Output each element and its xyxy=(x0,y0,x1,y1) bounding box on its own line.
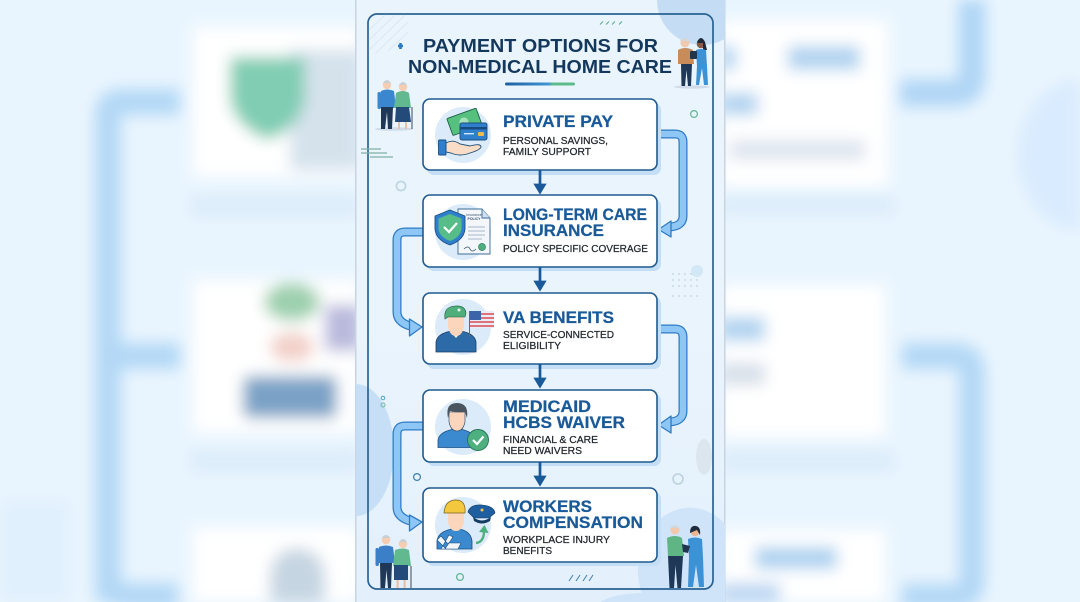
heading xyxy=(503,206,647,240)
icon: shield and policy: POLICY xyxy=(467,217,481,221)
connector: Medicaid to workers compensation xyxy=(397,426,423,531)
heading: LONG-TERM CARE xyxy=(503,206,647,224)
blurred background: right side xyxy=(720,0,1080,602)
connector: long-term care to VA benefits xyxy=(397,232,423,336)
description: WORKPLACE INJURY xyxy=(503,534,610,546)
people: elder and nurse top right xyxy=(674,38,710,89)
people: couple top left xyxy=(375,80,413,131)
icon: money, card and hand xyxy=(435,107,491,163)
description: ELIGIBILITY xyxy=(503,340,561,352)
heading: PRIVATE PAY xyxy=(503,113,613,131)
title xyxy=(408,35,672,77)
icon: person with check xyxy=(435,399,491,455)
heading: COMPENSATION xyxy=(503,514,643,532)
panel: VA benefits xyxy=(423,293,661,369)
heading: INSURANCE xyxy=(503,222,604,240)
arrow down 3 xyxy=(534,364,546,388)
outer frame xyxy=(368,14,713,589)
title: PAYMENT OPTIONS FOR xyxy=(423,35,658,56)
arrow down 2 xyxy=(534,267,546,291)
decorative accents xyxy=(361,15,712,581)
description: FAMILY SUPPORT xyxy=(503,146,592,158)
panel: long-term care insurance xyxy=(423,195,661,271)
description xyxy=(503,135,608,158)
description xyxy=(503,329,614,352)
heading: VA BENEFITS xyxy=(503,309,614,327)
description xyxy=(503,534,610,557)
heading: WORKERS xyxy=(503,498,592,516)
heading xyxy=(503,398,625,432)
description: FINANCIAL & CARE xyxy=(503,434,598,446)
description: NEED WAIVERS xyxy=(503,445,582,457)
icon: soldier and flag xyxy=(435,299,494,355)
icon: shield and policy xyxy=(435,204,491,260)
panel: workers compensation xyxy=(423,488,661,566)
heading: MEDICAID xyxy=(503,398,591,416)
connector: VA benefits to Medicaid xyxy=(657,329,683,433)
title underline xyxy=(505,82,575,86)
center panel background xyxy=(355,0,726,602)
arrow down 4 xyxy=(534,462,546,486)
arrow down 1 xyxy=(534,170,546,194)
heading: HCBS WAIVER xyxy=(503,414,625,432)
connector: private pay to long-term care xyxy=(657,134,683,237)
description: PERSONAL SAVINGS, xyxy=(503,135,608,147)
description: POLICY SPECIFIC COVERAGE xyxy=(503,243,648,255)
people: man and nurse bottom right xyxy=(667,525,704,588)
description: BENEFITS xyxy=(503,545,552,557)
people: couple bottom left xyxy=(376,535,411,588)
icon: worker and cap xyxy=(435,497,495,553)
panel: Medicaid HCBS waiver xyxy=(423,390,661,466)
heading xyxy=(503,498,643,532)
title: NON-MEDICAL HOME CARE xyxy=(408,56,672,77)
panel: private pay xyxy=(423,99,661,175)
description xyxy=(503,434,598,457)
description: SERVICE-CONNECTED xyxy=(503,329,614,341)
icon: shield and policy: Insurance xyxy=(466,213,482,217)
